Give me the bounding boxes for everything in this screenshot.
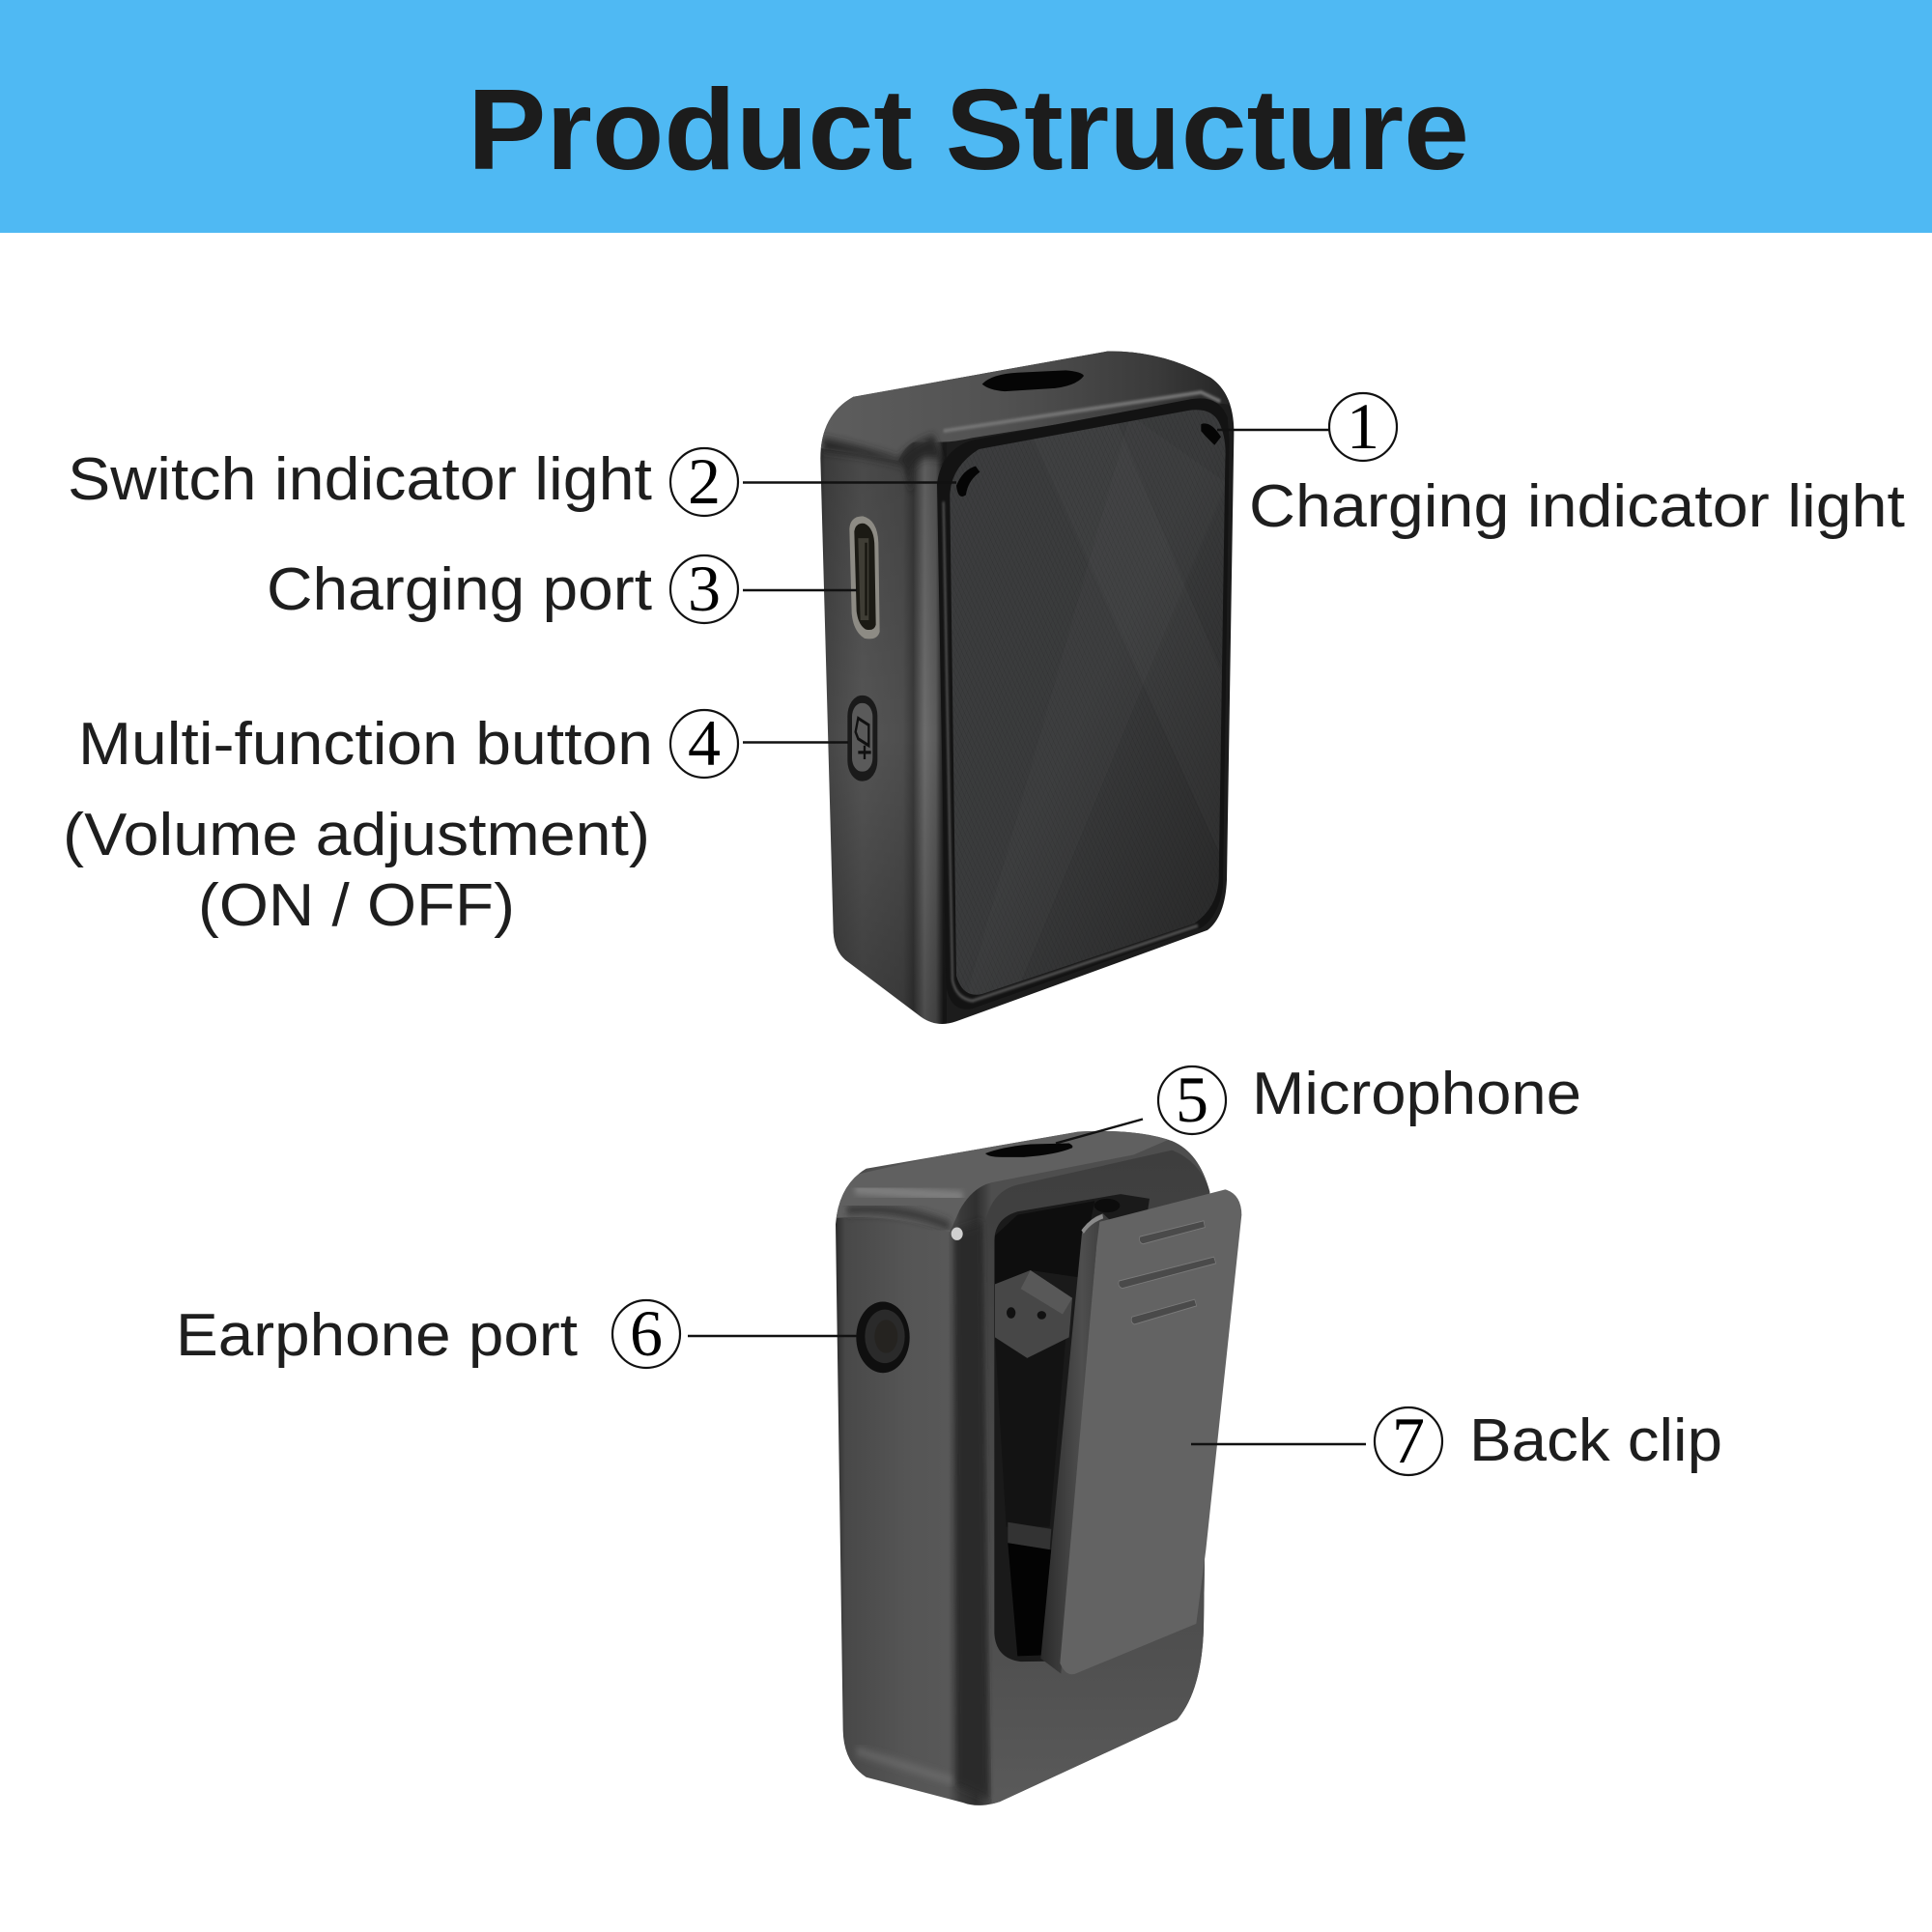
clip hinge pin [1094,1199,1120,1212]
callout 1: charging indicator light [1217,389,1905,540]
clip recess [994,1194,1150,1662]
top face [837,1130,1169,1232]
body shading [811,342,1243,1031]
clip ridges [1119,1221,1216,1324]
multi-function button [847,696,877,781]
callout 6: earphone port: Earphone port [176,1302,578,1369]
callout 2: switch indicator light: 2 [688,444,721,518]
callout 1: charging indicator light: Charging indicator light [1249,473,1905,540]
callout 7: back clip: Back clip [1469,1407,1722,1474]
callout 4: multi-function button [63,706,848,939]
clip edge [1040,1213,1109,1674]
callout 4: multi-function button: (Volume adjustment) [63,802,650,868]
shoulder shading [847,1209,950,1227]
callout 2: switch indicator light [68,444,956,518]
callout 5: microphone: Microphone [1252,1061,1581,1127]
textured panel [950,410,1226,995]
product: back view of device [831,1124,1241,1808]
callout 7: back clip [1191,1404,1722,1477]
callout 1: charging indicator light: 1 [1347,389,1379,463]
back clip [1060,1189,1241,1674]
charging indicator light [1201,423,1221,445]
spring band [1008,1522,1051,1549]
callout 6: earphone port: 6 [630,1296,663,1370]
clip edge highlight [1083,1216,1103,1232]
body shading [831,1124,1210,1808]
body silhouette [836,1131,1209,1805]
top face [821,352,1231,460]
product: front view of device [811,342,1243,1031]
callout 5: microphone: 5 [1176,1063,1208,1136]
panel texture [951,411,1225,988]
charging port [849,516,880,639]
microphone slot [985,1143,1072,1157]
callout 3: charging port: Charging port [267,556,652,623]
header band [0,0,1932,233]
callout 2: switch indicator light: Switch indicator light [68,446,652,513]
callout 6: earphone port [176,1296,857,1370]
microphone slot [982,370,1084,391]
callout 7: back clip: 7 [1392,1404,1425,1477]
rear strip shadow [954,1222,988,1800]
callout 3: charging port: 3 [688,552,721,625]
switch indicator light [956,467,980,497]
front frame [937,398,1230,1009]
shoulder shading [821,433,940,481]
recess upper shadow [995,1201,1094,1284]
frame bevel line [944,501,1198,1001]
callout 4: multi-function button: Multi-function button [78,711,653,778]
spring cavity [1008,1543,1051,1656]
body silhouette [820,352,1234,1024]
callout 3: charging port [267,552,857,625]
shoulder highlight [855,1189,963,1196]
rear face [983,1151,1210,1808]
hinge block [995,1270,1072,1358]
bottom rim [857,1750,953,1781]
callout 5: microphone [1056,1061,1581,1144]
earphone port [856,1302,910,1373]
corner highlight [952,1228,963,1240]
callout 4: multi-function button: 4 [688,706,721,780]
title: Product Structure [468,66,1469,194]
top ridge [944,392,1220,431]
callout 4: multi-function button: (ON / OFF) [198,872,515,939]
spring columns [995,1337,1065,1526]
